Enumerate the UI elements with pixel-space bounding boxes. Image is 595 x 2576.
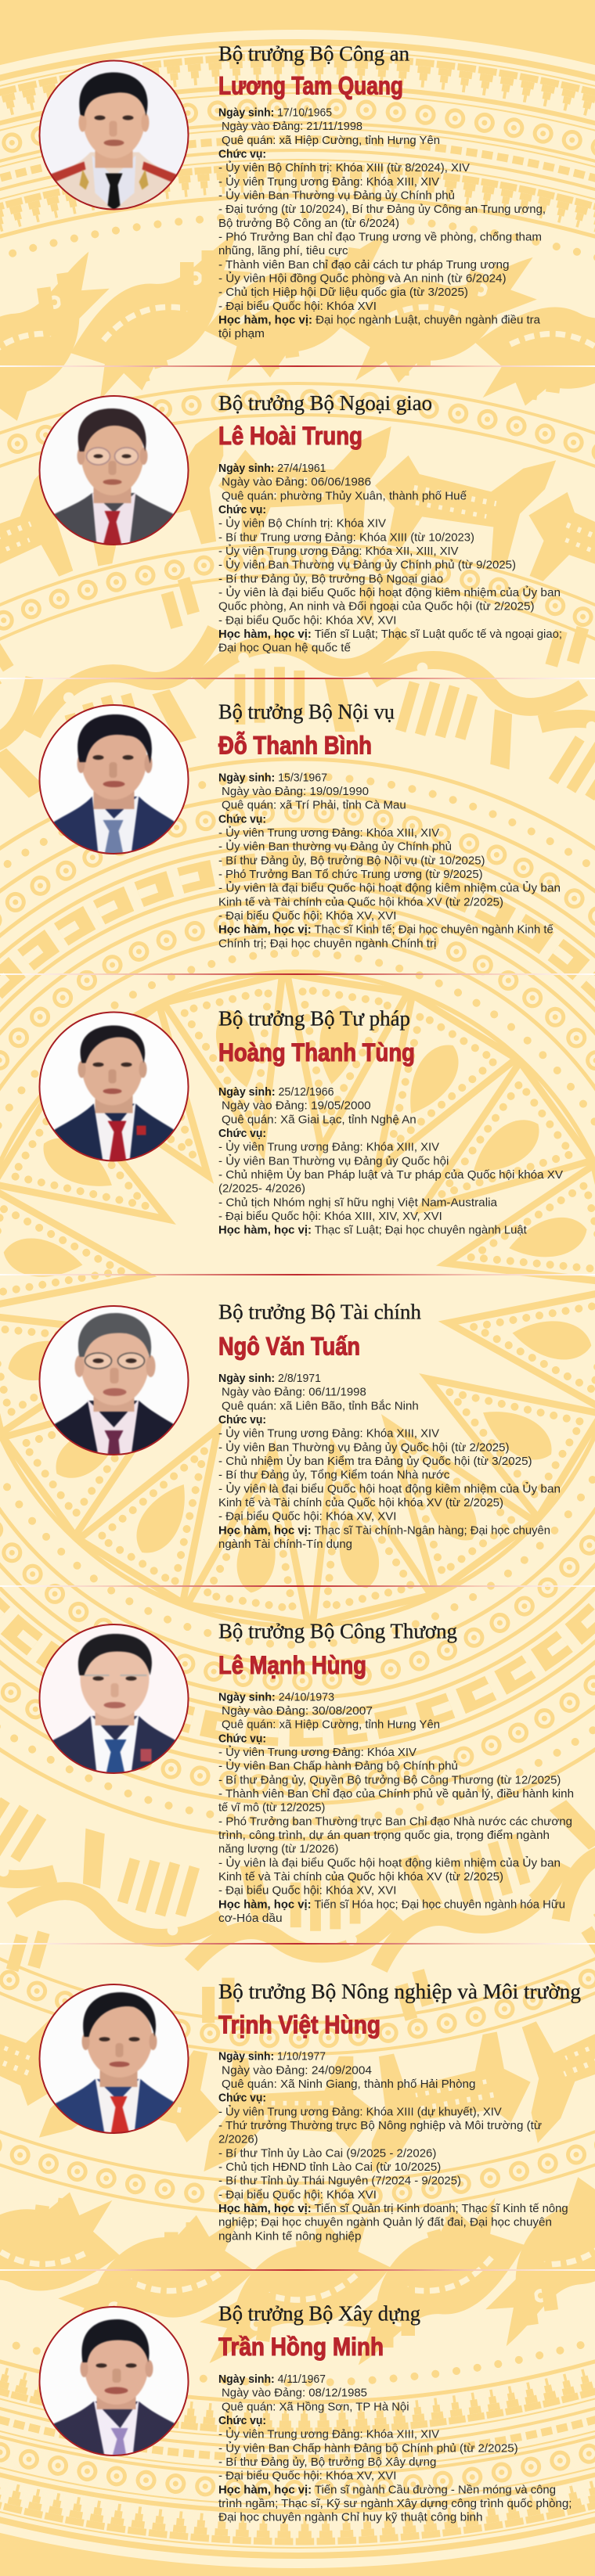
bio text: Ngày sinh: 27/4/1961 — [218, 462, 326, 475]
bio text — [218, 2050, 568, 2243]
bio text: - Đại biểu Quốc hội: Khóa XV, XVI — [218, 2470, 396, 2483]
bio text: - Đại biểu Quốc hội: Khóa XVI — [218, 2188, 377, 2201]
bio text: - Ủy viên là đại biểu Quốc hội hoạt động kiêm nhiệm của Ủy ban — [218, 585, 561, 599]
bio text: Quê quán: xã Liên Bão, tỉnh Bắc Ninh — [222, 1399, 419, 1412]
bio text — [218, 771, 561, 950]
bio text: - Ủy viên Ban Thường vụ Đảng ủy Quốc hội (từ 2/2025) — [218, 1440, 509, 1454]
title: Bộ trưởng Bộ Công an — [218, 42, 409, 66]
bio text: - Chủ tịch HĐND tỉnh Lào Cai (từ 10/2025) — [218, 2160, 441, 2174]
bio text: - Bí thư Trung ương Đảng: Khóa XIII (từ 10/2023) — [218, 531, 474, 544]
portrait: Ngô Văn Tuấn — [39, 1305, 189, 1455]
bio text: - Đại biểu Quốc hội: Khóa XV, XVI — [218, 1510, 396, 1524]
bio text: Ngày vào Đảng: 30/08/2007 — [222, 1704, 373, 1718]
bio text: - Ủy viên Trung ương Đảng: Khóa XIII (dự khuyết), XIV — [218, 2104, 502, 2118]
name: Trần Hồng Minh — [218, 2333, 384, 2361]
bio text: - Thứ trưởng Thường trực Bộ Nông nghiệp và Môi trường (từ — [218, 2119, 542, 2132]
bio text: Ngày vào Đảng: 06/11/1998 — [222, 1386, 366, 1399]
panel: Bộ Nông nghiệp và Môi trường — [39, 1980, 581, 2243]
bio text: - Bí thư Đảng ủy, Bộ trưởng Bộ Nội vụ (từ 10/2025) — [218, 854, 485, 867]
bio text: - Ủy viên Ban Thường vụ Đảng ủy Chính phủ (từ 9/2025) — [218, 558, 516, 572]
panel: Bộ Công an — [39, 42, 546, 340]
name: Lương Tam Quang — [218, 72, 403, 100]
bio text: Ngày sinh: 4/11/1967 — [218, 2373, 326, 2386]
bio text: - Ủy viên Bộ Chính trị: Khóa XIII (từ 8/2024), XIV — [218, 160, 470, 174]
bio text: Học hàm, học vị: Thạc sĩ Luật; Đại học chuyên ngành Luật — [218, 1224, 528, 1237]
bio text: Học hàm, học vị: Tiến sĩ ngành Cầu đường - Nền móng và công — [218, 2483, 556, 2496]
bio text: tế vĩ mô (từ 12/2025) — [218, 1801, 325, 1815]
bio text: - Bí thư Đảng ủy, Bộ trưởng Bộ Xây dựng — [218, 2455, 436, 2469]
title: Bộ trưởng Bộ Tài chính — [218, 1301, 421, 1324]
bio text — [218, 1372, 561, 1551]
bio text: Kinh tế và Tài chính của Quốc hội khóa XV (từ 2/2025) — [218, 1496, 503, 1509]
bio text: Chính trị; Đại học chuyên ngành Chính trị — [218, 937, 436, 950]
bio text: Ngày sinh: 15/3/1967 — [218, 771, 327, 784]
bio text: nhũng, lãng phí, tiêu cực — [218, 244, 348, 257]
bio text: Ngày sinh: 1/10/1977 — [218, 2050, 326, 2063]
bio text: Ngày sinh: 2/8/1971 — [218, 1372, 321, 1385]
bio text: - Ủy viên Hội đồng Quốc phòng và An ninh (từ 6/2024) — [218, 271, 507, 285]
title: Bộ trưởng Bộ Xây dựng — [218, 2302, 420, 2326]
bio text: Học hàm, học vị: Tiến sĩ Hóa học; Đại học chuyên ngành hóa Hữu — [218, 1898, 565, 1911]
bio text: 2/2026) — [218, 2133, 258, 2146]
bio text: - Ủy viên Ban Thường vụ Đảng ủy Chính phủ — [218, 188, 455, 202]
bio text: Chức vụ: — [218, 2092, 266, 2105]
bio text: Chức vụ: — [218, 1413, 266, 1427]
title: Bộ trưởng Bộ Công Thương — [218, 1619, 457, 1642]
bio text: trình, công trình, dự án quan trọng quốc gia, trọng điểm ngành — [218, 1829, 550, 1842]
bio text: - Đại biểu Quốc hội: Khóa XV, XVI — [218, 1884, 396, 1898]
bio text: Học hàm, học vị: Thạc sĩ Kinh tế; Đại học chuyên ngành Kinh tế — [218, 923, 554, 937]
panel: Bộ Tài chính — [39, 1301, 561, 1551]
portrait: Lương Tam Quang — [39, 59, 189, 210]
panel: Bộ Công Thương — [39, 1619, 574, 1925]
bio text — [218, 1085, 563, 1237]
bio text: - Ủy viên Ban Chấp hành Đảng bộ Chính phủ (từ 2/2025) — [218, 2441, 518, 2455]
bio text: Ngày vào Đảng: 06/06/1986 — [222, 476, 371, 489]
name: Ngô Văn Tuấn — [218, 1332, 360, 1360]
panel: Bộ Ngoại giao — [39, 391, 562, 655]
panel: Bộ Nội vụ — [39, 700, 561, 950]
bio text: Chức vụ: — [218, 2414, 266, 2427]
bio text: Quê quán: xã Hiệp Cường, tỉnh Hưng Yên — [222, 134, 440, 147]
bio text: - Ủy viên Trung ương Đảng: Khóa XIII, XIV — [218, 1427, 439, 1441]
panel: Bộ Xây dựng — [39, 2302, 572, 2524]
bio text: - Đại biểu Quốc hội: Khóa XVI — [218, 300, 377, 313]
bio text: Ngày sinh: 25/12/1966 — [218, 1085, 334, 1099]
bio text: Ngày vào Đảng: 19/05/2000 — [222, 1099, 371, 1113]
bio text — [218, 1690, 574, 1925]
bio text: - Thành viên Ban chỉ đạo cải cách tư pháp Trung ương — [218, 258, 509, 272]
bio text: Học hàm, học vị: Tiến sĩ Luật; Thạc sĩ Luật quốc tế và ngoại giao; — [218, 628, 562, 641]
bio text: Chức vụ: — [218, 147, 266, 161]
bio text: Quê quán: Xã Hồng Sơn, TP Hà Nội — [222, 2400, 409, 2413]
portrait: Trần Hồng Minh — [39, 2306, 189, 2456]
name: Lê Mạnh Hùng — [218, 1651, 366, 1679]
title: Bộ trưởng Bộ Tư pháp — [218, 1007, 410, 1031]
bio text: trình ngầm; Thạc sĩ, Kỹ sư ngành Xây dựng công trình quốc phòng; — [218, 2497, 572, 2510]
bio text: - Ủy viên là đại biểu Quốc hội hoạt động kiêm nhiệm của Ủy ban — [218, 1855, 561, 1869]
bio text: - Ủy viên Trung ương Đảng: Khóa XII, XIII, XIV — [218, 544, 459, 558]
bio text: Chức vụ: — [218, 503, 266, 516]
bio text: Ngày vào Đảng: 19/09/1990 — [222, 785, 369, 798]
portrait: Hoàng Thanh Tùng — [39, 1011, 189, 1161]
bio text: - Bí thư Đảng ủy, Tổng Kiểm toán Nhà nước — [218, 1469, 450, 1482]
bio text: - Ủy viên là đại biểu Quốc hội hoạt động kiêm nhiệm của Ủy ban — [218, 1481, 561, 1495]
bio text: Chức vụ: — [218, 812, 266, 826]
bio text: - Đại biểu Quốc hội: Khóa XIII, XIV, XV, XVI — [218, 1210, 442, 1223]
bio text: - Ủy viên là đại biểu Quốc hội hoạt động kiêm nhiệm của Ủy ban — [218, 881, 561, 895]
bio text: ngành Kinh tế nông nghiệp — [218, 2229, 362, 2243]
bio text: Đại học chuyên ngành Chỉ huy kỹ thuật công binh — [218, 2511, 483, 2524]
title: Bộ trưởng Bộ Nội vụ — [218, 700, 395, 723]
bio text: - Ủy viên Trung ương Đảng: Khóa XIII, XIV — [218, 1140, 439, 1154]
bio text: cơ-Hóa dầu — [218, 1912, 283, 1925]
title: Bộ trưởng Bộ Ngoại giao — [218, 391, 432, 415]
portrait: Lê Hoài Trung — [39, 395, 189, 545]
bio text: - Phó Trưởng Ban chỉ đạo Trung ương về phòng, chống tham — [218, 230, 542, 244]
bio text: Ngày vào Đảng: 08/12/1985 — [222, 2387, 367, 2400]
bio text: Học hàm, học vị: Tiến sĩ Quản trị Kinh doanh; Thạc sĩ Kinh tế nông — [218, 2202, 568, 2215]
bio text: nghiệp; Đại học chuyên ngành Quản lý đất đai, Đại học chuyên — [218, 2216, 552, 2229]
bio text: Ngày sinh: 24/10/1973 — [218, 1690, 334, 1704]
bio text: - Bí thư Đảng ủy, Quyền Bộ trưởng Bộ Công Thương (từ 12/2025) — [218, 1773, 561, 1786]
portrait: Trịnh Việt Hùng — [39, 1984, 189, 2134]
bio text: Kinh tế và Tài chính của Quốc hội khóa XV (từ 2/2025) — [218, 1870, 503, 1883]
bio text: - Chủ nhiệm Ủy ban Kiểm tra Đảng ủy Quốc hội (từ 3/2025) — [218, 1454, 532, 1468]
bio text: Quê quán: phường Thủy Xuân, thành phố Huế — [222, 489, 467, 502]
bio text: Ngày vào Đảng: 21/11/1998 — [222, 120, 362, 133]
bio text: - Đại biểu Quốc hội: Khóa XV, XVI — [218, 909, 396, 923]
bio text: - Thành viên Ban Chỉ đạo của Chính phủ về quản lý, điều hành kinh — [218, 1787, 574, 1801]
bio text: - Ủy viên Ban thường vụ Đảng ủy Chính phủ — [218, 840, 452, 854]
bio text: - Ủy viên Trung ương Đảng: Khóa XIII, XIV — [218, 174, 439, 189]
bio text: - Phó Trưởng Ban Tổ chức Trung ương (từ 9/2025) — [218, 868, 483, 881]
bio text: Ngày sinh: 17/10/1965 — [218, 106, 332, 119]
bio text: Chức vụ: — [218, 1732, 266, 1745]
bio text: - Bí thư Tỉnh ủy Lào Cai (9/2025 - 2/2026) — [218, 2146, 436, 2160]
bio text: Kinh tế và Tài chính của Quốc hội khóa XV (từ 2/2025) — [218, 895, 503, 908]
portrait: Đỗ Thanh Bình — [39, 704, 189, 854]
bio text: - Bí thư Đảng ủy, Bộ trưởng Bộ Ngoại giao — [218, 572, 443, 585]
bio text: Quê quán: xã Hiệp Cường, tỉnh Hưng Yên — [222, 1718, 440, 1732]
bio text: - Đại biểu Quốc hội: Khóa XV, XVI — [218, 613, 396, 627]
bio text: Quốc phòng, An ninh và Đối ngoại của Quốc hội (từ 2/2025) — [218, 600, 534, 613]
title: Bộ trưởng Bộ Nông nghiệp và Môi trường — [218, 1980, 581, 2003]
bio text — [218, 106, 546, 340]
bio text: - Chủ tịch Nhóm nghị sĩ hữu nghị Việt Nam-Australia — [218, 1196, 498, 1209]
bio text: - Chủ tịch Hiệp hội Dữ liệu quốc gia (từ 3/2025) — [218, 286, 468, 299]
bio text: - Phó Trưởng ban Thường trực Ban Chỉ đạo Nhà nước các chương — [218, 1815, 572, 1828]
bio text: Đại học Quan hệ quốc tế — [218, 642, 352, 655]
bio text: tội phạm — [218, 327, 265, 340]
portrait: Lê Mạnh Hùng — [39, 1624, 189, 1774]
bio text: Học hàm, học vị: Thạc sĩ Tài chính-Ngân hàng; Đại học chuyên — [218, 1524, 550, 1537]
bio text: Bộ trưởng Bộ Công an (từ 6/2024) — [218, 217, 399, 230]
bio text: Quê quán: Xã Ninh Giang, thành phố Hải Phòng — [222, 2078, 475, 2091]
bio text: - Đại tướng (từ 10/2024), Bí thư Đảng ủy Công an Trung ương, — [218, 203, 546, 216]
name: Hoàng Thanh Tùng — [218, 1038, 415, 1067]
bio text: - Bí thư Tỉnh ủy Thái Nguyên (7/2024 - 9/2025) — [218, 2175, 461, 2188]
name: Trịnh Việt Hùng — [218, 2010, 380, 2038]
bio text: - Ủy viên Ban Thường vụ Đảng ủy Quốc hội — [218, 1153, 449, 1167]
bio text: Quê quán: xã Trí Phải, tỉnh Cà Mau — [222, 799, 406, 812]
bio text: - Ủy viên Trung ương Đảng: Khóa XIII, XIV — [218, 826, 439, 840]
bio text: - Ủy viên Ban Chấp hành Đảng bộ Chính phủ — [218, 1759, 458, 1773]
bio text: (2/2025- 4/2026) — [218, 1182, 305, 1196]
bio text: Học hàm, học vị: Đại học ngành Luật, chuyên ngành điều tra — [218, 313, 541, 327]
bio text — [218, 2373, 572, 2524]
bio text: ngành Tài chính-Tín dụng — [218, 1538, 352, 1551]
bio text: - Ủy viên Trung ương Đảng: Khóa XIV — [218, 1745, 416, 1759]
bio text: - Chủ nhiệm Ủy ban Pháp luật và Tư pháp của Quốc hội khóa XV — [218, 1167, 563, 1182]
bio text: Chức vụ: — [218, 1127, 266, 1140]
bio text: năng lượng (từ 1/2026) — [218, 1843, 338, 1856]
bio text: - Ủy viên Bộ Chính trị: Khóa XIV — [218, 516, 386, 531]
bio text — [218, 462, 562, 655]
bio text: - Ủy viên Trung ương Đảng: Khóa XIII, XIV — [218, 2427, 439, 2441]
name: Lê Hoài Trung — [218, 422, 362, 450]
bio text: Ngày vào Đảng: 24/09/2004 — [222, 2063, 372, 2077]
bio text: Quê quán: Xã Giai Lạc, tỉnh Nghệ An — [222, 1113, 416, 1126]
name: Đỗ Thanh Bình — [218, 731, 372, 759]
panel: Bộ Tư pháp — [39, 1007, 563, 1237]
